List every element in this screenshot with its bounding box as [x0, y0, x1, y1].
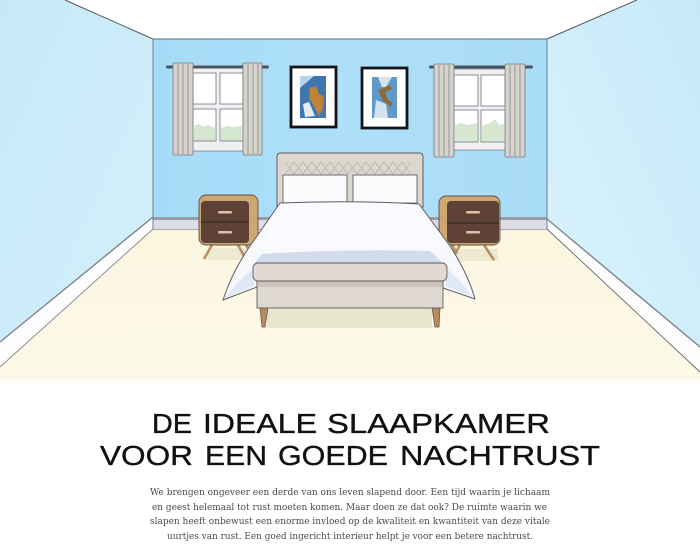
right baseboard — [547, 219, 700, 372]
bench top — [253, 263, 447, 281]
right wall — [547, 0, 700, 347]
title: EEN — [205, 440, 267, 471]
nightstand shadow — [208, 248, 246, 260]
intro text: uurtjes van rust. Een goed ingericht interieur helpt je voor een betere nachtrust. — [167, 532, 533, 542]
right nightstand — [439, 196, 500, 261]
duvet fold shadow — [254, 250, 444, 264]
intro text: en geest helemaal tot rust moeten komen. Maar doen ze dat ook? De ruimte waarin we — [152, 503, 547, 513]
right window curtains — [434, 64, 525, 157]
title: VOOR — [100, 440, 193, 471]
bench body — [257, 280, 443, 308]
bench shadow — [267, 308, 432, 328]
right window — [429, 64, 533, 157]
left nightstand — [199, 195, 258, 260]
intro text: We brengen ongeveer een derde van ons leven slapend door. Een tijd waarin je lichaam — [150, 488, 551, 498]
back baseboard — [153, 217, 547, 230]
left wall — [0, 0, 153, 342]
back wall — [153, 39, 547, 218]
title: GOEDE — [278, 440, 388, 471]
duvet side shadows — [225, 268, 473, 298]
framed picture left — [291, 67, 336, 127]
bench legs — [260, 308, 440, 327]
title: IDEALE — [203, 408, 317, 439]
title: SLAAPKAMER — [327, 408, 550, 439]
intro text: slapen heeft onbewust een enorme invloed op de kwaliteit en kwantiteit van deze vitale — [150, 517, 550, 527]
title: NACHTRUST — [400, 440, 600, 471]
floor — [0, 229, 700, 380]
illustration: bedroom — [0, 0, 700, 380]
pillows — [283, 175, 417, 203]
bed — [223, 153, 475, 328]
duvet — [223, 202, 475, 300]
left baseboard — [0, 217, 153, 367]
nightstand shadow — [452, 249, 498, 261]
intro text — [150, 488, 551, 542]
left window — [166, 63, 269, 155]
headboard — [277, 153, 423, 207]
left window curtains — [173, 63, 262, 155]
framed picture right — [362, 68, 407, 128]
title: DE — [152, 408, 192, 439]
room outlines — [65, 0, 637, 229]
title — [100, 408, 600, 471]
